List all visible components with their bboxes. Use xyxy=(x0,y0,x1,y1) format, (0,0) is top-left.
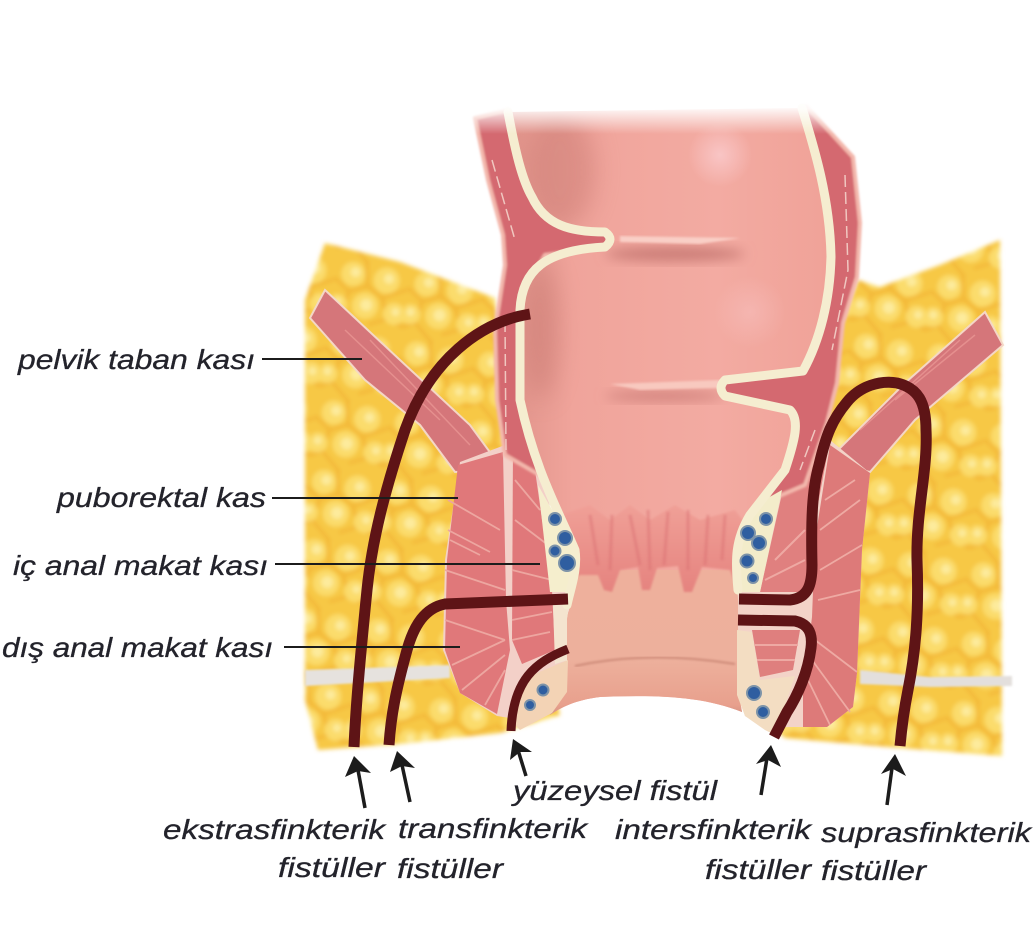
puborectal and external sphincter muscle left xyxy=(445,452,510,714)
gland area left xyxy=(538,485,578,592)
adipose tissue right xyxy=(740,240,1002,756)
arrow: suprasphincteric xyxy=(881,754,906,805)
label: ekstrasfinkterik fistüller: ekstrasfinkterik xyxy=(163,814,387,845)
highlight top xyxy=(696,132,745,180)
rectal wall left xyxy=(475,110,610,480)
pelvic floor muscle right xyxy=(826,312,1003,472)
gland area right xyxy=(733,490,782,592)
internal sphincter muscle left xyxy=(512,445,555,664)
label: dış anal makat kası: dış anal makat kası xyxy=(2,632,273,663)
arrow: extrasphincteric xyxy=(345,756,371,808)
rectal wall right xyxy=(700,106,860,500)
anal crypts xyxy=(560,505,750,592)
pelvic floor muscle left xyxy=(310,290,503,472)
label: intersfinkterik fistüller: intersfinkterik xyxy=(615,814,813,845)
connective band right xyxy=(860,670,1012,687)
label: ekstrasfinkterik fistüller xyxy=(163,814,387,883)
crypt streaks xyxy=(590,510,725,570)
intersphincteric fistula lower branch xyxy=(738,620,811,737)
label: suprasfinkterik fistüller xyxy=(821,817,1033,886)
glands: blue dots xyxy=(525,513,772,718)
lining strip left lower xyxy=(553,604,568,664)
lower gland area right xyxy=(737,630,795,735)
label: transfinkterik fistüller xyxy=(397,813,589,884)
leader line: internal sphincter xyxy=(275,563,540,565)
label: iç anal makat kası: iç anal makat kası xyxy=(13,550,268,581)
mucosa lining left xyxy=(508,112,610,605)
label: transfinkterik fistüller: transfinkterik xyxy=(398,813,589,844)
label: transfinkterik fistüller: fistüller xyxy=(397,853,505,884)
anal canal xyxy=(550,570,750,720)
mucosa lining right xyxy=(721,108,831,590)
label: suprasfinkterik fistüller: suprasfinkterik xyxy=(821,817,1033,848)
fold two highlight xyxy=(610,380,720,390)
label: ekstrasfinkterik fistüller: fistüller xyxy=(278,852,387,883)
shading upper xyxy=(525,110,595,230)
label: pelvik taban kası: pelvik taban kası xyxy=(17,344,255,375)
internal sphincter muscle right xyxy=(752,420,830,677)
connective band left xyxy=(305,665,450,686)
connective backing left xyxy=(443,445,567,718)
arrow: transsphincteric xyxy=(390,751,415,802)
label: puborektal kas: puborektal kas xyxy=(56,482,266,513)
fold one highlight xyxy=(620,236,740,244)
leader line: external sphincter xyxy=(284,646,460,648)
leader line: puborectal xyxy=(272,497,458,499)
label: suprasfinkterik fistüller: fistüller xyxy=(821,855,928,886)
fold two shadow xyxy=(605,391,725,401)
superficial fistula xyxy=(511,649,568,731)
connective backing right xyxy=(735,440,870,728)
canal crease xyxy=(575,657,735,666)
fold one shadow xyxy=(605,247,745,261)
external sphincter muscle right xyxy=(803,445,870,727)
label: intersfinkterik fistüller: fistüller xyxy=(705,854,813,885)
extrasphincteric fistula xyxy=(354,314,530,747)
label: intersfinkterik fistüller xyxy=(615,814,813,885)
highlight middle xyxy=(732,293,769,330)
shading below fold one xyxy=(522,260,558,400)
adipose tissue left xyxy=(305,243,560,750)
arrow: superficial xyxy=(510,739,532,776)
lower gland area left xyxy=(512,660,568,730)
leader line: pelvic floor xyxy=(262,358,362,360)
label: yüzeysel fistül: yüzeysel fistül xyxy=(511,775,718,806)
rectal lumen xyxy=(508,108,830,720)
arrow: intersphincteric xyxy=(756,745,781,795)
intersphincteric fistula upper branch and suprasphincteric fistula xyxy=(739,382,926,746)
transsphincteric fistula xyxy=(389,599,568,745)
top fade xyxy=(455,92,875,134)
